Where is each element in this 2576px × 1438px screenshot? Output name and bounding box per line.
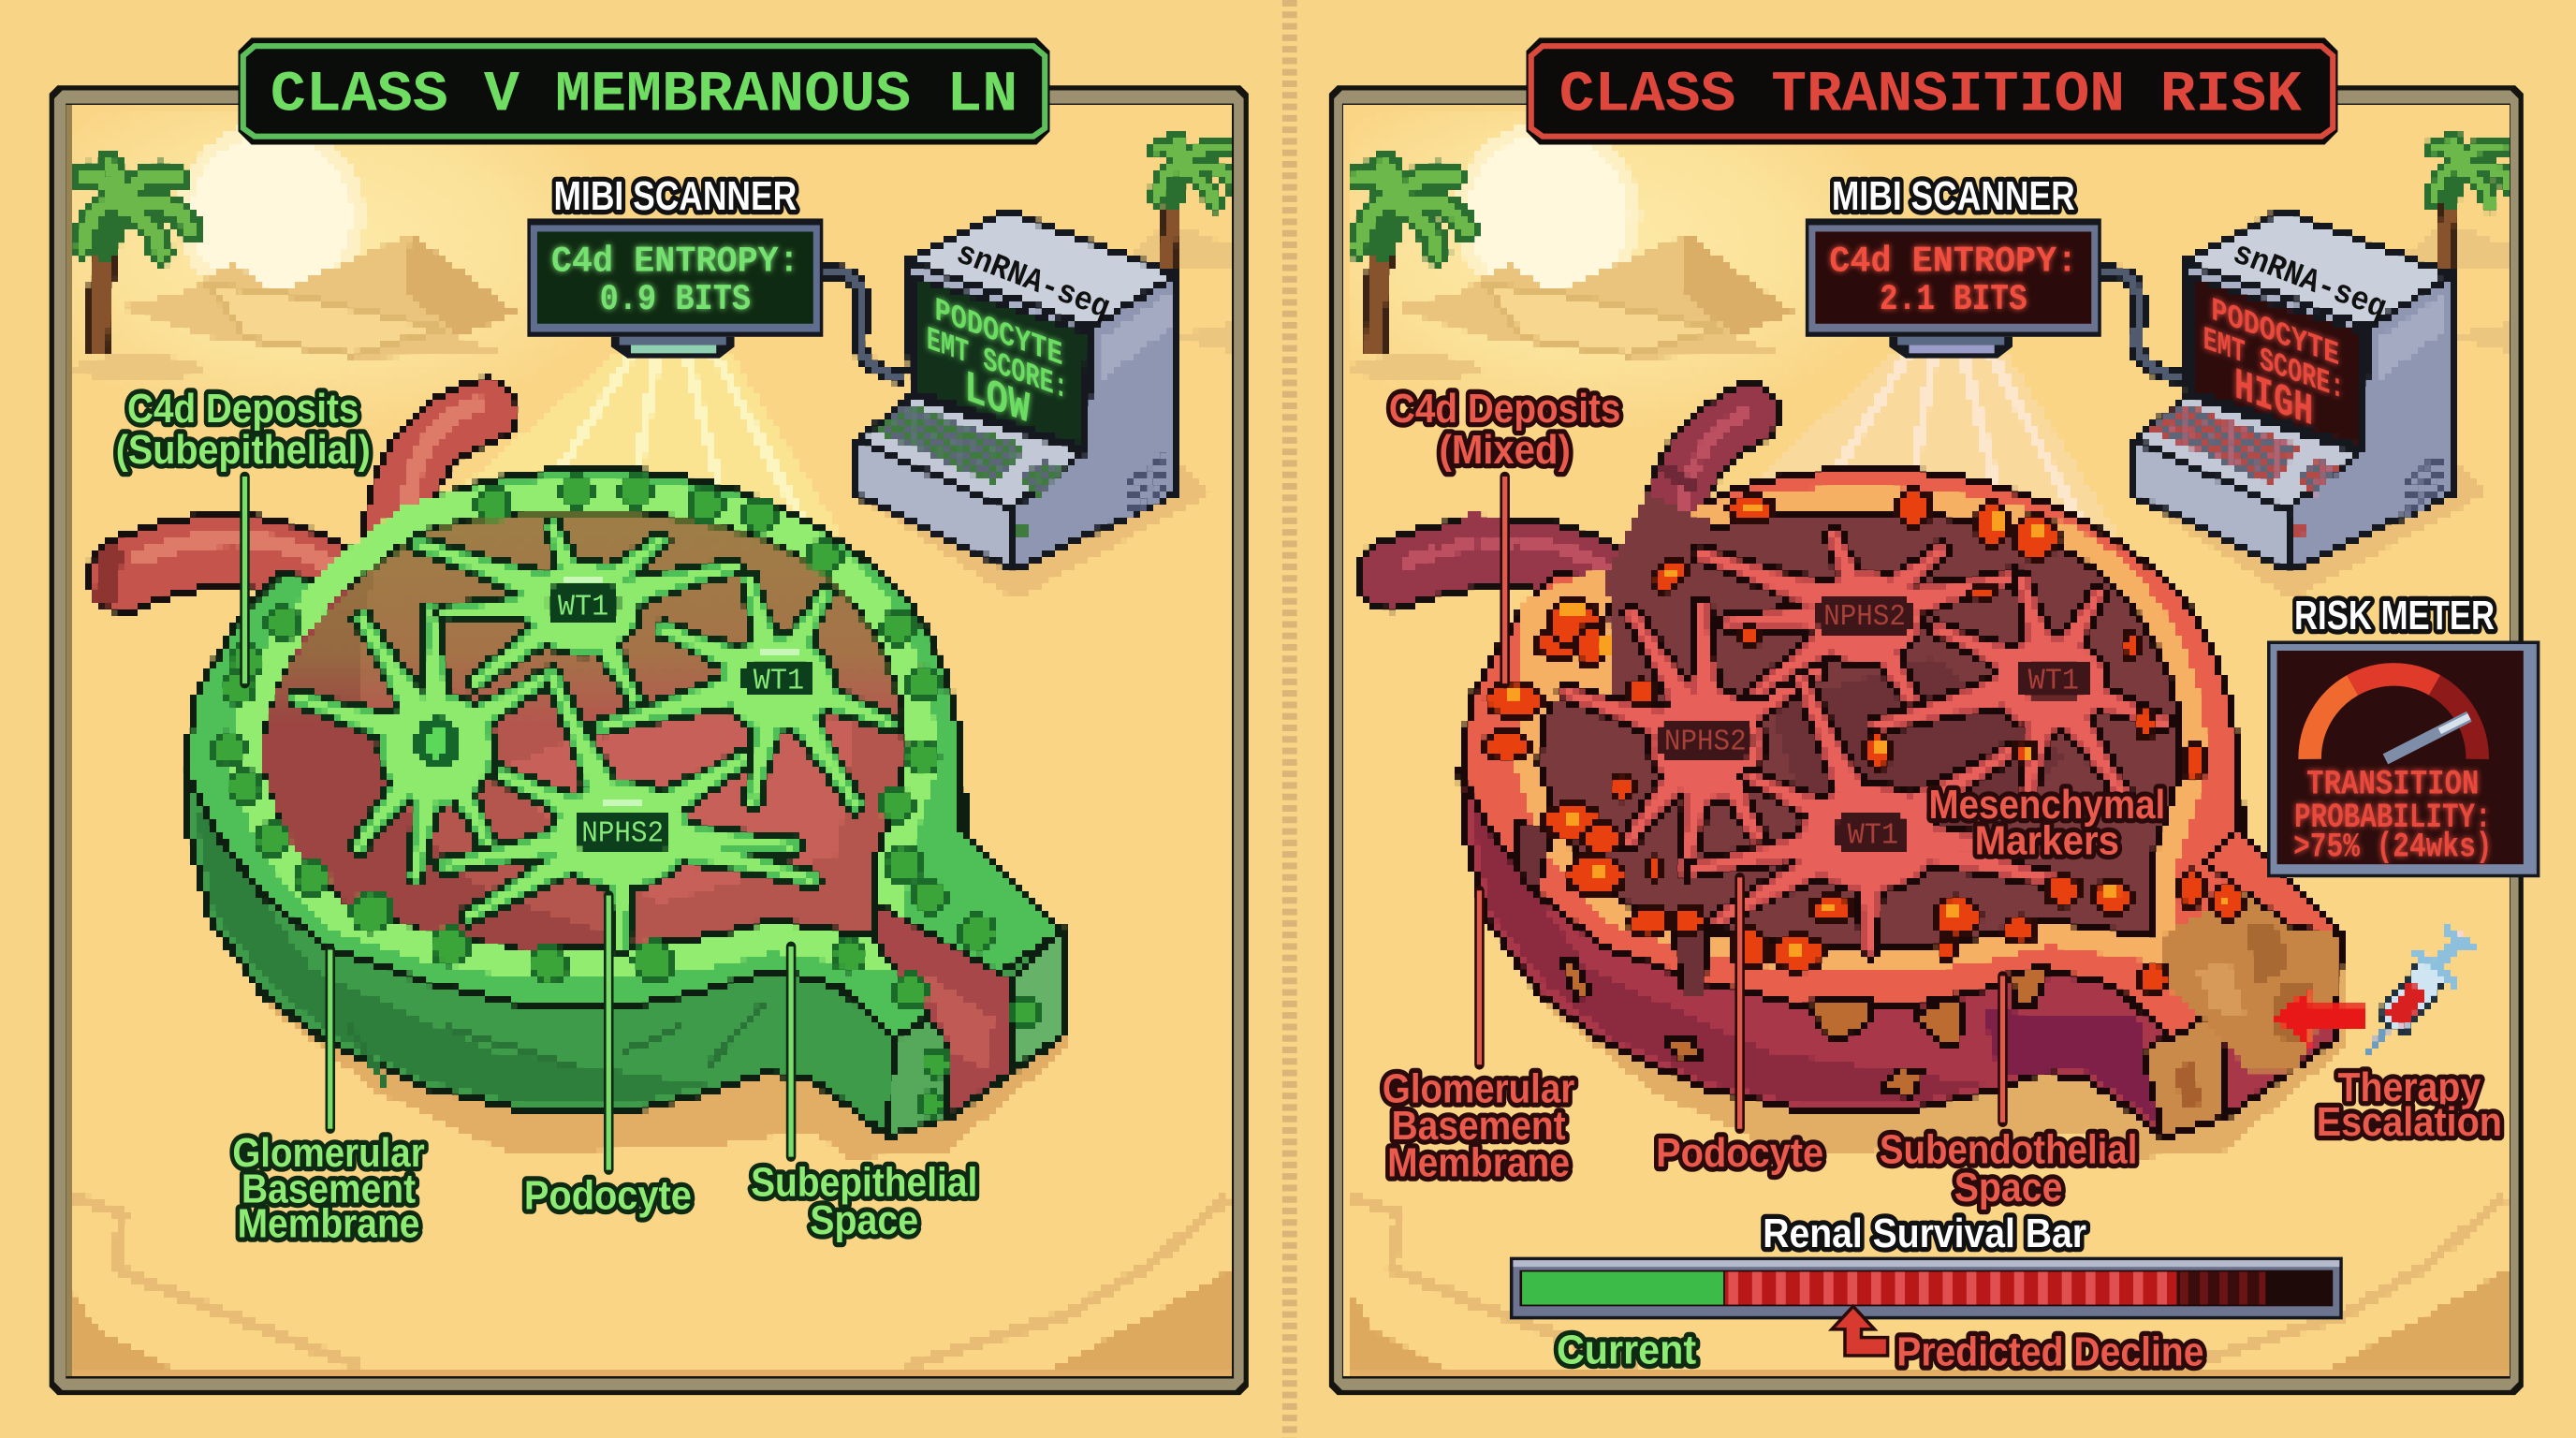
callout: therapy escalation: Escalation	[2317, 1099, 2502, 1145]
risk meter: >75% (24wks)	[2293, 828, 2492, 867]
callout: therapy escalation: Therapy	[2338, 1064, 2481, 1110]
risk meter: TRANSITION	[2306, 766, 2479, 805]
brown damaged end	[2160, 829, 2339, 1071]
brown wall patches	[1560, 960, 2050, 1097]
risk meter: PROBABILITY:	[2294, 799, 2492, 838]
MIBI scanner: MIBI SCANNER	[1832, 173, 2075, 219]
center divider	[1285, 0, 1294, 1438]
computer labels	[2203, 235, 2392, 438]
nuclei and badges	[414, 575, 815, 851]
callout: glomerular basement membrane	[1383, 890, 1574, 1186]
callout: glomerular basement membrane: Glomerular	[1383, 1066, 1574, 1112]
computer labels: LOW	[964, 361, 1031, 436]
mesenchymal markers label: Markers	[1975, 818, 2119, 864]
beam overlay	[263, 512, 904, 948]
callout: glomerular basement membrane: Basement	[242, 1167, 416, 1212]
MIBI scanner: C4d ENTROPY:	[1829, 242, 2077, 283]
light beams	[370, 353, 842, 567]
renal survival bar: Current	[1557, 1328, 1696, 1373]
podocyte marker labels: WT1	[1848, 819, 1898, 852]
lava highlights	[1508, 503, 2230, 955]
callout: C4d deposits: C4d Deposits	[1389, 386, 1620, 432]
title banner: CLASS TRANSITION RISK	[1559, 64, 2302, 128]
risk meter: RISK METER	[2294, 593, 2495, 638]
arrow to bar	[1832, 1306, 1888, 1356]
mesenchymal markers label	[1928, 782, 2165, 864]
desert background	[1350, 111, 2510, 1376]
desert background	[72, 111, 1232, 1376]
syringe	[2346, 918, 2484, 1071]
podocyte marker labels	[558, 591, 804, 851]
glomerular rim	[1462, 469, 2339, 1038]
callout: C4d deposits	[116, 386, 371, 683]
podocyte marker labels: WT1	[558, 591, 608, 624]
callout: subendothelial space: Space	[1954, 1165, 2063, 1211]
gauge arc	[2310, 674, 2478, 759]
callout: glomerular basement membrane: Membrane	[1387, 1140, 1570, 1186]
glomerular rim	[185, 469, 1063, 1038]
survival: predicted decline segment	[1725, 1271, 2265, 1305]
callout: glomerular basement membrane: Basement	[1392, 1103, 1566, 1149]
callout: podocyte: Podocyte	[1656, 1130, 1823, 1176]
panel frame	[50, 85, 1249, 1395]
scene art: desert, computer and damaged glomerulus	[1277, 66, 2525, 1380]
podocyte marker labels: NPHS2	[1823, 601, 1906, 634]
lava deposits	[1484, 490, 2243, 992]
renal survival bar: Renal Survival Bar	[1763, 1211, 2086, 1256]
callout: C4d deposits: (Subepithelial)	[116, 427, 371, 473]
callout: C4d deposits: (Mixed)	[1439, 427, 1571, 473]
damaged interior	[1515, 493, 2181, 996]
afferent vessel	[1392, 522, 1647, 608]
podocyte marker labels: NPHS2	[581, 818, 664, 851]
panel: class transition risk	[1277, 37, 2539, 1395]
efferent vessel	[394, 404, 487, 559]
callout: therapy escalation	[2317, 1064, 2502, 1145]
podocyte marker labels	[1664, 601, 2079, 852]
callout: C4d deposits	[1389, 386, 1620, 683]
C4d deposit nodules	[212, 475, 1040, 1116]
title banner: CLASS V MEMBRANOUS LN	[271, 64, 1017, 128]
panel frame	[1329, 85, 2524, 1395]
glomerular wall	[184, 772, 1064, 1137]
risk meter	[2267, 593, 2539, 877]
computer labels: PODOCYTE	[935, 291, 1063, 374]
MIBI scanner: MIBI SCANNER	[553, 173, 797, 219]
mesenchymal markers label: Mesenchymal	[1928, 782, 2165, 828]
callout: glomerular basement membrane: Glomerular	[232, 1130, 425, 1176]
callout: C4d deposits: C4d Deposits	[127, 386, 359, 432]
MIBI scanner: 2.1 BITS	[1880, 279, 2027, 320]
callout: subendothelial space	[1880, 976, 2137, 1211]
podocyte marker labels: NPHS2	[1664, 726, 1747, 758]
podocyte marker labels: WT1	[754, 665, 804, 697]
efferent vessel	[1664, 414, 1749, 559]
callout: podocyte: Podocyte	[524, 1173, 692, 1219]
capillary interior	[263, 512, 1010, 1117]
cable	[2097, 271, 2184, 378]
glomerular wall	[1460, 772, 2341, 1137]
glomerulus shadow	[1460, 772, 2345, 1158]
panel: class V membranous LN	[0, 37, 1249, 1395]
callout: glomerular basement membrane: Membrane	[238, 1201, 419, 1247]
podocyte marker labels: WT1	[2028, 665, 2079, 697]
gauge needle	[2385, 716, 2469, 759]
survival: current segment	[1522, 1271, 1723, 1305]
MIBI scanner	[527, 173, 823, 359]
computer labels: EMT SCORE:	[2203, 320, 2345, 408]
MIBI scanner	[1806, 173, 2101, 359]
MIBI scanner: 0.9 BITS	[600, 279, 751, 320]
computer labels: HIGH	[2234, 360, 2313, 438]
renal survival bar: Predicted Decline	[1896, 1328, 2203, 1374]
callout: subepithelial space: Subepithelial	[751, 1160, 977, 1206]
callout: glomerular basement membrane	[232, 949, 425, 1247]
computer labels: PODOCYTE	[2211, 291, 2339, 374]
title banner	[1526, 37, 2338, 144]
title banner	[238, 37, 1050, 144]
podocytes	[298, 526, 890, 946]
computer labels: EMT SCORE:	[927, 320, 1068, 408]
computer	[855, 211, 1178, 570]
podocytes	[1567, 536, 2163, 949]
computer labels	[927, 235, 1115, 436]
afferent vessel	[105, 538, 370, 608]
glomerulus shadow	[184, 772, 1068, 1158]
callout: subendothelial space: Subendothelial	[1880, 1127, 2137, 1173]
scene art: desert, computer and glomerulus	[0, 66, 1249, 1380]
light beams	[1662, 353, 2117, 567]
computer	[2130, 211, 2454, 570]
callout: subepithelial space: Space	[810, 1197, 918, 1243]
cable	[820, 271, 907, 378]
MIBI scanner: C4d ENTROPY:	[551, 242, 799, 283]
callout: subepithelial space	[751, 946, 977, 1243]
computer labels: snRNA-seq	[951, 235, 1115, 328]
computer labels: snRNA-seq	[2228, 235, 2392, 328]
renal survival bar	[1510, 1211, 2343, 1374]
red arrow	[2272, 990, 2365, 1047]
marker badges	[1658, 594, 2089, 853]
